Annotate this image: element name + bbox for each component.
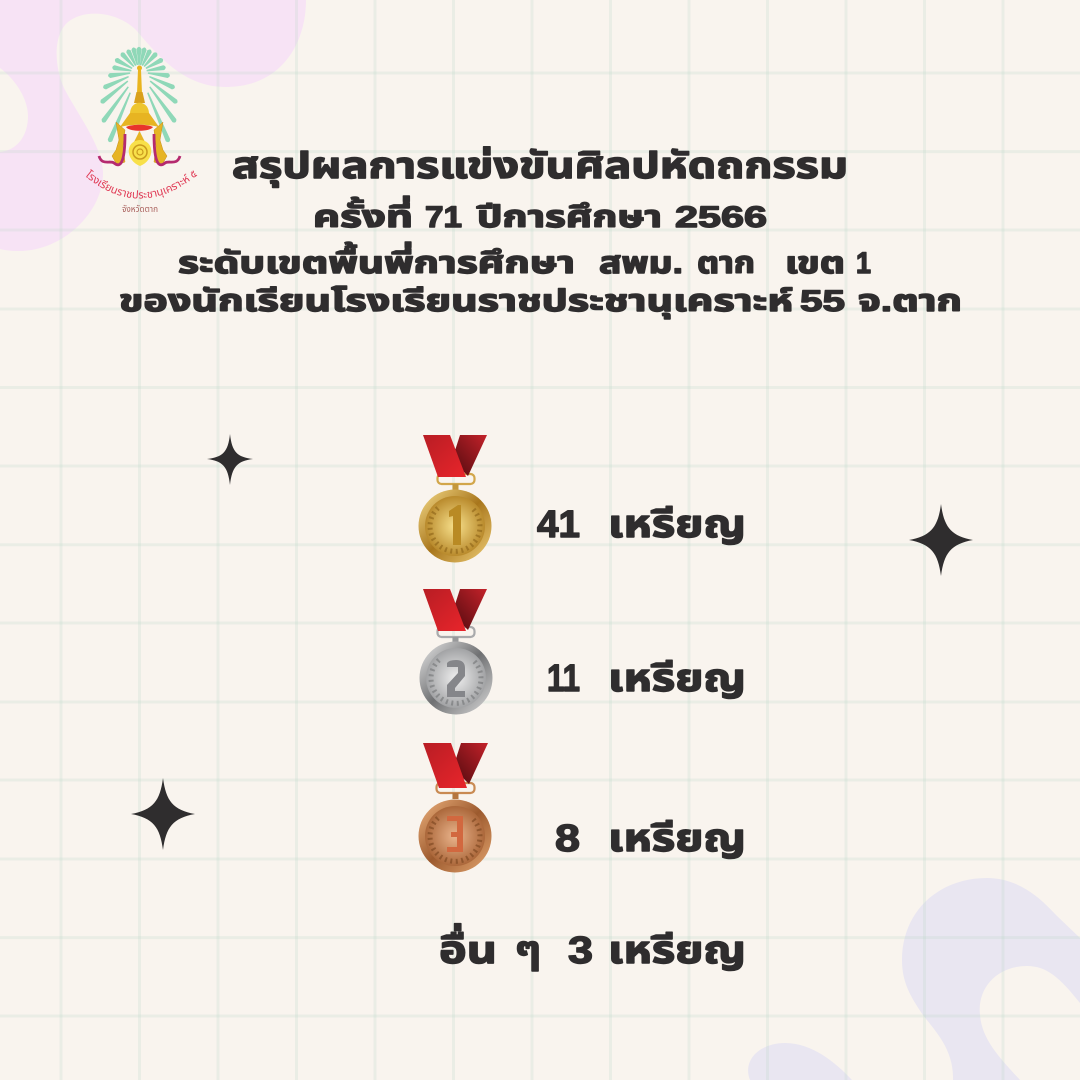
title line 1: สรุปผลการแข่งขันศิลปหัดถกรรม [232, 145, 848, 187]
logo ribbons [99, 134, 180, 165]
icon: gold medal [418, 435, 492, 562]
logo rays [100, 47, 178, 143]
text: gold count: 41 [537, 504, 580, 546]
text: other awards count: อื่น [439, 923, 497, 972]
logo side figures [112, 122, 167, 165]
background blob: pink [0, 0, 306, 251]
text: silver count: 11 [547, 658, 580, 700]
background blob: lavender small [748, 1043, 852, 1080]
title line 2 [313, 195, 767, 234]
title line 4: จ.ตาก [858, 285, 962, 318]
text: other awards count: ๆ [515, 930, 541, 972]
title line 4: 55 [800, 285, 845, 318]
text: other awards count: เหรียญ [608, 930, 746, 972]
title line 3 [178, 241, 871, 280]
text: silver count [547, 658, 746, 700]
logo: school emblem [86, 46, 198, 214]
title [119, 145, 962, 319]
title line 3: สพม. [599, 247, 683, 280]
text: bronze count [555, 818, 746, 860]
text: gold count [537, 504, 746, 546]
background blob: lavender large [902, 878, 1080, 1080]
title line 3: ระดับเขตพื้นพี่การศึกษา [178, 241, 575, 280]
logo crown [120, 66, 159, 131]
text: other awards count: 3 [568, 930, 593, 972]
title line 3: ตาก [697, 247, 755, 280]
icon: bronze medal [418, 743, 492, 872]
title line 2: 2566 [675, 201, 767, 234]
title line 2: ครั้งที่ [313, 195, 413, 234]
title line 2: 71 [425, 201, 462, 234]
title line 3: เขต [785, 247, 845, 280]
text: gold count: เหรียญ [608, 504, 746, 546]
text: silver count: เหรียญ [608, 658, 746, 700]
title line 4: ของนักเรียนโรงเรียนราชประชานุเคราะห์ [119, 285, 793, 319]
title line 3: 1 [856, 247, 871, 280]
text: bronze count: เหรียญ [608, 818, 746, 860]
icon: sparkle small [207, 434, 253, 485]
title line 4 [119, 285, 962, 319]
icon: silver medal [420, 589, 492, 714]
title line 2: ปีการศึกษา [476, 201, 662, 234]
logo province: จังหวัดตาก [122, 204, 158, 214]
icon: sparkle left [131, 778, 195, 850]
text: bronze count: 8 [555, 818, 580, 860]
text: other awards count [439, 923, 746, 972]
logo central swirl [129, 131, 151, 166]
icon: sparkle right [909, 504, 973, 576]
